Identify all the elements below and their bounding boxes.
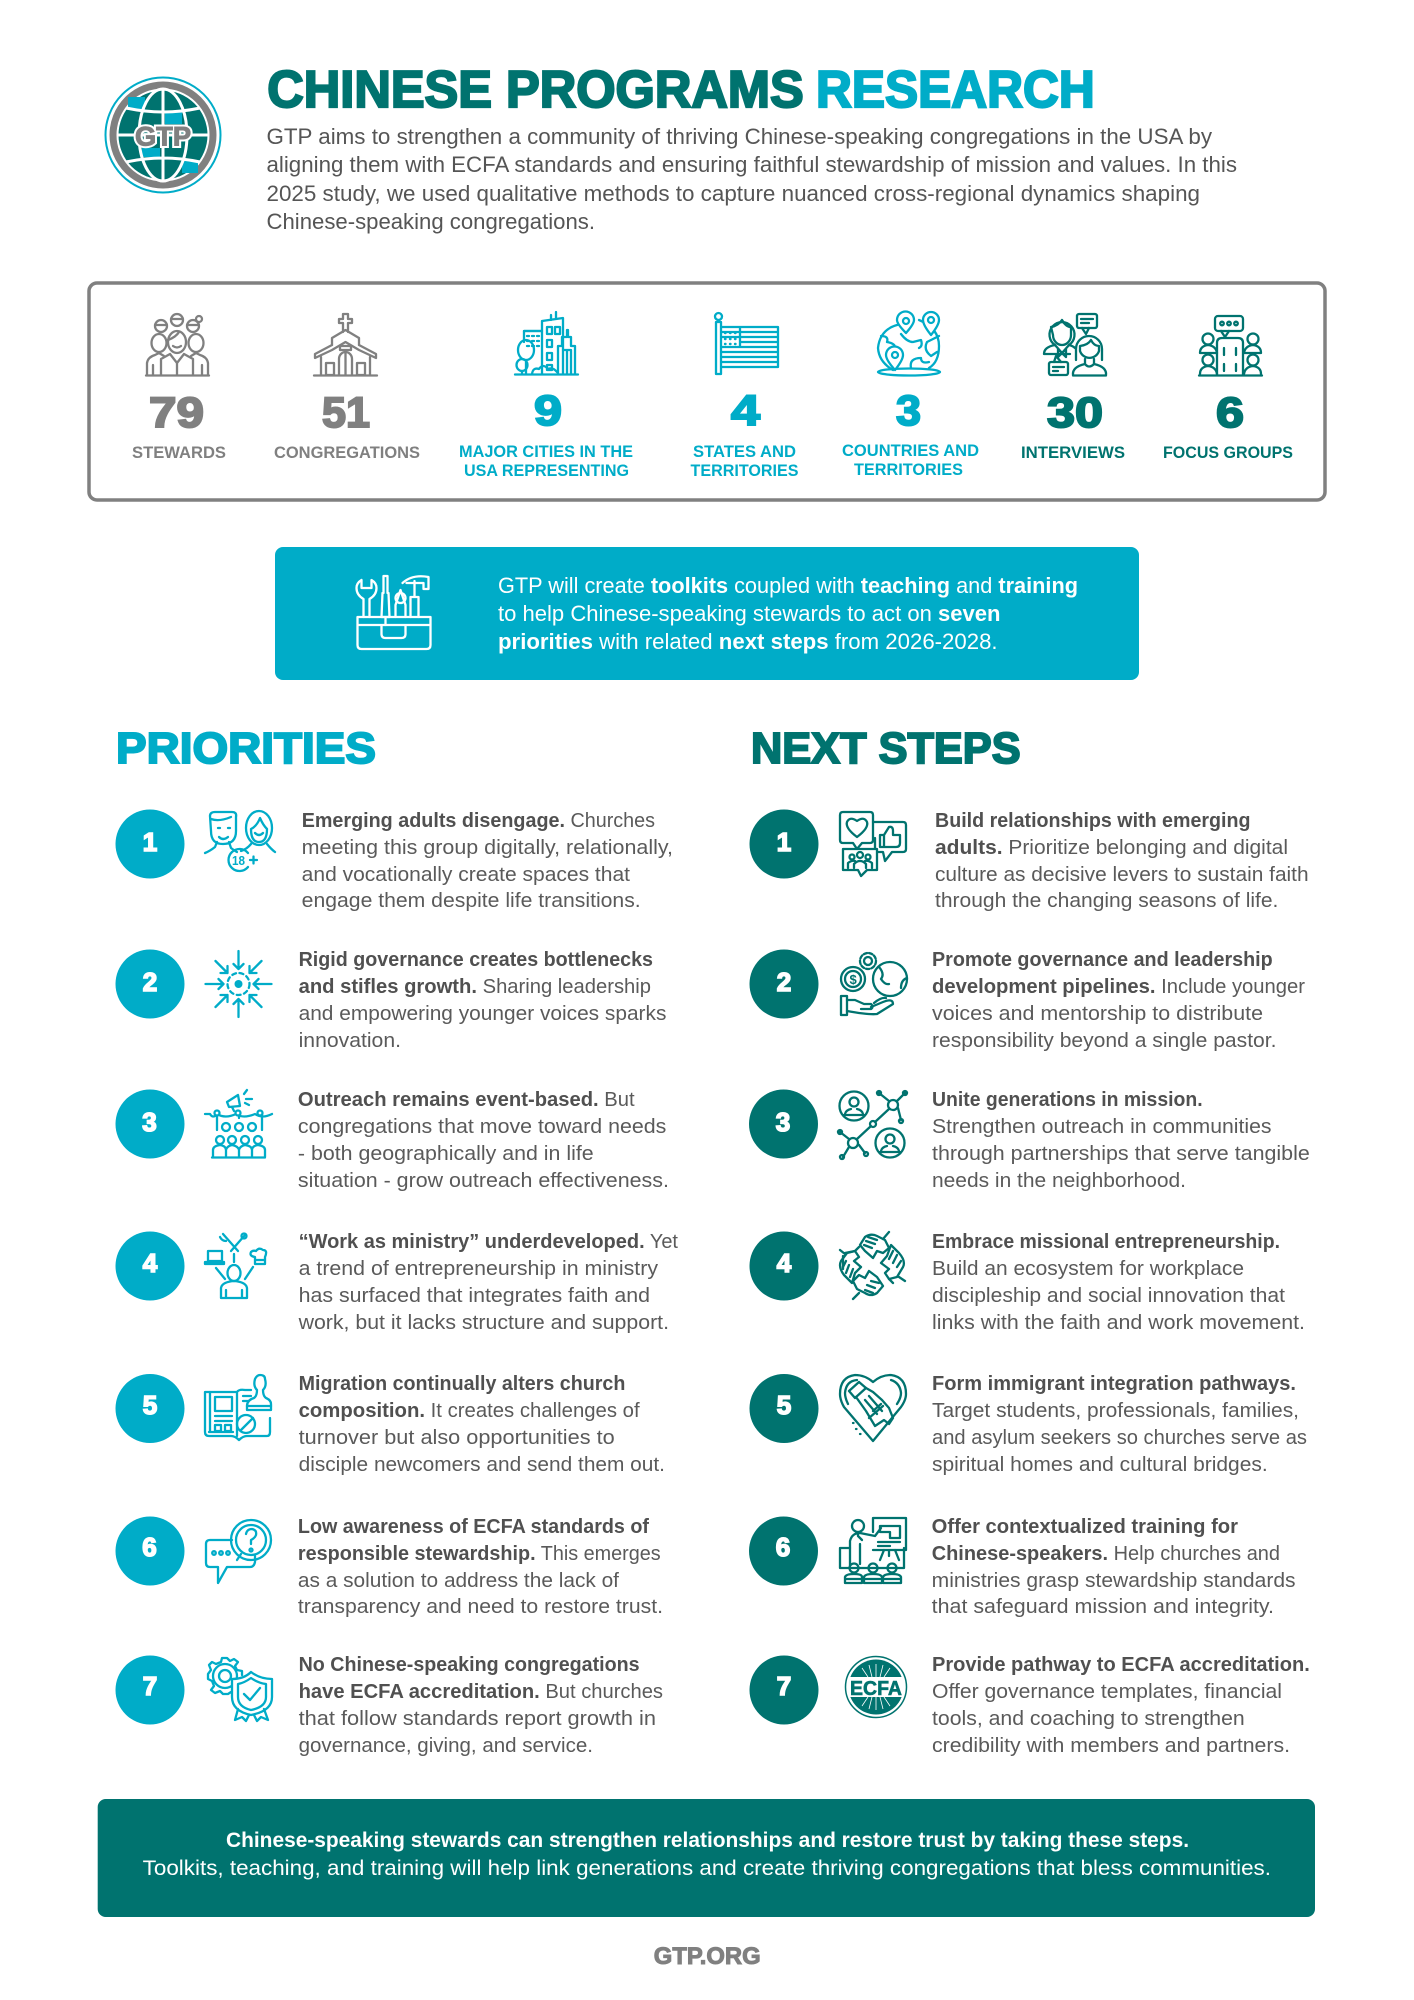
next step 2: 2 <box>777 967 791 997</box>
label: STEWARDS <box>132 443 226 462</box>
text: Chinese-speakers. Help churches and <box>932 1543 1280 1565</box>
text <box>299 949 666 1052</box>
next step 3 <box>749 1089 1310 1192</box>
logo: GTP globe: GTP <box>135 122 191 152</box>
icon: money, globe and hand: $ <box>850 972 858 987</box>
icon: city skyline <box>515 312 578 374</box>
text: innovation. <box>299 1030 401 1052</box>
next step 1: 1 <box>777 827 791 857</box>
closing statement regular: Toolkits, teaching, and training will help link generations and create thriving congregations that bless communities. <box>143 1857 1271 1880</box>
banner text: GTP will create toolkits coupled with teaching and training <box>498 573 1078 598</box>
text <box>298 1516 663 1618</box>
priority 3: 3 <box>142 1107 157 1137</box>
next step 4: 4 <box>777 1248 792 1278</box>
text: responsibility beyond a single pastor. <box>932 1030 1276 1052</box>
label: MAJOR CITIES IN THE <box>459 442 633 461</box>
text: Strengthen outreach in communities <box>932 1116 1272 1138</box>
text: and stifles growth. Sharing leadership <box>299 976 651 998</box>
icon: two people talking <box>1044 314 1106 376</box>
title: RESEARCH <box>816 61 1095 119</box>
text: ministries grasp stewardship standards <box>932 1570 1296 1592</box>
next step 7 <box>750 1654 1310 1757</box>
text <box>932 1516 1296 1618</box>
text: transparency and need to restore trust. <box>298 1596 663 1618</box>
priority 3 <box>116 1089 669 1192</box>
icon: speech bubble and question mark <box>206 1520 271 1583</box>
text: - both geographically and in life <box>298 1143 594 1165</box>
text: Embrace missional entrepreneurship. <box>932 1231 1280 1253</box>
number: 30 <box>1047 389 1103 437</box>
icon: stewards group <box>146 314 209 376</box>
banner text <box>498 573 1078 654</box>
icon: toolbox <box>356 576 430 649</box>
next step 6: 6 <box>776 1532 790 1562</box>
text <box>935 810 1309 912</box>
panel: toolkit banner <box>275 547 1139 680</box>
icon: emerging adults 18+: 18 <box>232 853 245 868</box>
icon: money, globe and hand <box>841 953 907 1015</box>
next step 3: 3 <box>776 1107 790 1137</box>
label: INTERVIEWS <box>1021 443 1125 462</box>
number: 3 <box>896 387 921 435</box>
label <box>459 442 633 480</box>
text <box>299 1373 665 1476</box>
priority 5 <box>116 1373 665 1476</box>
stat: states and territories <box>690 313 798 480</box>
icon: gear and shield ribbon <box>208 1658 272 1721</box>
stat: focus groups <box>1163 316 1293 462</box>
text: and vocationally create spaces that <box>302 864 630 886</box>
stat: congregations <box>274 314 420 462</box>
text: Promote governance and leadership <box>932 949 1273 971</box>
priority 5: 5 <box>143 1390 157 1420</box>
text: spiritual homes and cultural bridges. <box>932 1454 1268 1476</box>
number: 79 <box>149 389 204 437</box>
next step 6 <box>749 1516 1296 1618</box>
footer url: GTP.ORG <box>654 1943 761 1970</box>
text: has surfaced that integrates faith and <box>299 1285 650 1307</box>
stat: stewards <box>132 314 226 462</box>
text: links with the faith and work movement. <box>932 1312 1305 1334</box>
text: composition. It creates challenges of <box>299 1400 640 1422</box>
icon: US flag <box>715 313 778 374</box>
icon: connected network of people <box>838 1091 907 1159</box>
icon: social speech bubbles <box>840 812 906 876</box>
text: credibility with members and partners. <box>932 1735 1290 1757</box>
priority 4: 4 <box>143 1248 158 1278</box>
panel: priorities list <box>116 810 678 1757</box>
text: Low awareness of ECFA standards of <box>298 1516 649 1538</box>
intro paragraph: 2025 study, we used qualitative methods to capture nuanced cross-regional dynamics shaping <box>266 181 1200 206</box>
icon: trainer and audience <box>840 1518 906 1583</box>
priority 7 <box>116 1654 663 1757</box>
heading: next steps: NEXT STEPS <box>751 724 1021 773</box>
priority 1 <box>116 810 673 912</box>
label: STATES AND <box>693 442 796 461</box>
text: Offer contextualized training for <box>932 1516 1238 1538</box>
text: Rigid governance creates bottlenecks <box>299 949 653 971</box>
text <box>932 1654 1310 1757</box>
icon: worker with tools <box>205 1234 266 1298</box>
text: as a solution to address the lack of <box>298 1570 619 1592</box>
banner text: to help Chinese-speaking stewards to act on seven <box>498 601 1000 626</box>
priority 2: 2 <box>143 967 157 997</box>
text: Offer governance templates, financial <box>932 1681 1282 1703</box>
number: 51 <box>322 389 370 437</box>
next step 5 <box>750 1373 1307 1476</box>
label <box>842 441 979 479</box>
intro paragraph <box>266 124 1237 234</box>
text: tools, and coaching to strengthen <box>932 1708 1245 1730</box>
text: “Work as ministry” underdeveloped. Yet <box>299 1231 678 1253</box>
text: No Chinese-speaking congregations <box>299 1654 640 1676</box>
text: and asylum seekers so churches serve as <box>932 1427 1307 1449</box>
text: congregations that move toward needs <box>298 1116 666 1138</box>
text <box>932 1373 1307 1476</box>
text: Build relationships with emerging <box>935 810 1250 832</box>
number: 6 <box>1216 389 1244 437</box>
text <box>298 1089 669 1192</box>
next step 4 <box>750 1231 1305 1334</box>
icon: crowd under a banner with megaphone <box>205 1090 272 1158</box>
text: governance, giving, and service. <box>299 1735 593 1757</box>
text <box>932 949 1305 1052</box>
text <box>298 1231 678 1334</box>
label: USA REPRESENTING <box>464 461 629 480</box>
title: CHINESE PROGRAMS <box>267 61 804 119</box>
icon: emerging adults 18+ <box>205 811 275 871</box>
title <box>267 61 1095 119</box>
priority 6 <box>116 1516 663 1618</box>
next step 2 <box>750 949 1305 1052</box>
text: Migration continually alters church <box>299 1373 625 1395</box>
text <box>932 1089 1310 1192</box>
icon: ECFA seal: ECFA <box>850 1678 902 1700</box>
text: adults. Prioritize belonging and digital <box>935 837 1288 859</box>
text: responsible stewardship. This emerges <box>298 1543 661 1565</box>
next step 1 <box>750 810 1309 912</box>
priority 2 <box>116 949 666 1052</box>
priority 1: 1 <box>143 827 157 857</box>
panel: closing banner <box>98 1799 1315 1917</box>
text: Provide pathway to ECFA accreditation. <box>932 1654 1310 1676</box>
text: culture as decisive levers to sustain faith <box>935 864 1309 886</box>
banner text: priorities with related next steps from 2026-2028. <box>498 629 998 654</box>
text: discipleship and social innovation that <box>932 1285 1285 1307</box>
icon: church <box>314 314 377 376</box>
stat: countries and territories <box>842 312 979 479</box>
text: Form immigrant integration pathways. <box>932 1373 1296 1395</box>
text: Target students, professionals, families, <box>932 1400 1299 1422</box>
icon: interlocked hands <box>840 1232 905 1299</box>
text: that safeguard mission and integrity. <box>932 1596 1274 1618</box>
icon: ECFA seal <box>846 1656 906 1718</box>
closing statement bold: Chinese-speaking stewards can strengthen relationships and restore trust by taking these steps. <box>226 1829 1189 1852</box>
text: Emerging adults disengage. Churches <box>302 810 655 832</box>
text: Unite generations in mission. <box>932 1089 1203 1111</box>
next step 5: 5 <box>777 1390 791 1420</box>
intro paragraph: aligning them with ECFA standards and ensuring faithful stewardship of mission and values. In this <box>266 152 1237 177</box>
text <box>299 1654 663 1757</box>
text <box>302 810 673 912</box>
text: turnover but also opportunities to <box>299 1427 615 1449</box>
label: COUNTRIES AND <box>842 441 979 460</box>
icon: book and stamp <box>205 1375 271 1440</box>
icon: group at a table <box>1199 316 1262 376</box>
icon: converging arrows <box>206 951 272 1017</box>
label: CONGREGATIONS <box>274 443 420 462</box>
text: Outreach remains event-based. But <box>298 1089 635 1111</box>
icon: globe with pins <box>878 312 940 376</box>
number: 9 <box>534 387 562 435</box>
text: needs in the neighborhood. <box>932 1170 1186 1192</box>
text: development pipelines. Include younger <box>932 976 1305 998</box>
label: TERRITORIES <box>690 461 798 480</box>
label: FOCUS GROUPS <box>1163 443 1293 462</box>
panel: next steps list <box>749 810 1310 1757</box>
intro paragraph: Chinese-speaking congregations. <box>266 209 595 234</box>
text: that follow standards report growth in <box>299 1708 656 1730</box>
intro paragraph: GTP aims to strengthen a community of thriving Chinese-speaking congregations in the USA by <box>266 124 1212 149</box>
text: voices and mentorship to distribute <box>932 1003 1263 1025</box>
priority 4 <box>116 1231 678 1334</box>
logo: GTP globe <box>106 78 220 192</box>
priority 6: 6 <box>142 1532 157 1562</box>
heading: priorities: PRIORITIES <box>116 724 376 773</box>
text: have ECFA accreditation. But churches <box>299 1681 663 1703</box>
text: meeting this group digitally, relationally, <box>302 837 673 859</box>
panel: statistics <box>89 283 1325 500</box>
text: through the changing seasons of life. <box>935 890 1278 912</box>
number: 4 <box>731 387 760 435</box>
text: Build an ecosystem for workplace <box>932 1258 1244 1280</box>
text: a trend of entrepreneurship in ministry <box>299 1258 658 1280</box>
text: situation - grow outreach effectiveness. <box>298 1170 669 1192</box>
text: and empowering younger voices sparks <box>299 1003 666 1025</box>
text: disciple newcomers and send them out. <box>299 1454 665 1476</box>
text: engage them despite life transitions. <box>302 890 641 912</box>
priority 7: 7 <box>143 1671 157 1701</box>
text: work, but it lacks structure and support. <box>298 1312 669 1334</box>
text: through partnerships that serve tangible <box>932 1143 1310 1165</box>
stat: interviews <box>1021 314 1125 462</box>
logo: GTP globe: GTP <box>135 122 191 152</box>
stat: major cities <box>459 312 633 480</box>
text <box>932 1231 1305 1334</box>
icon: hands in a heart <box>840 1375 906 1441</box>
next step 7: 7 <box>777 1671 791 1701</box>
label: TERRITORIES <box>854 460 963 479</box>
label <box>690 442 798 480</box>
